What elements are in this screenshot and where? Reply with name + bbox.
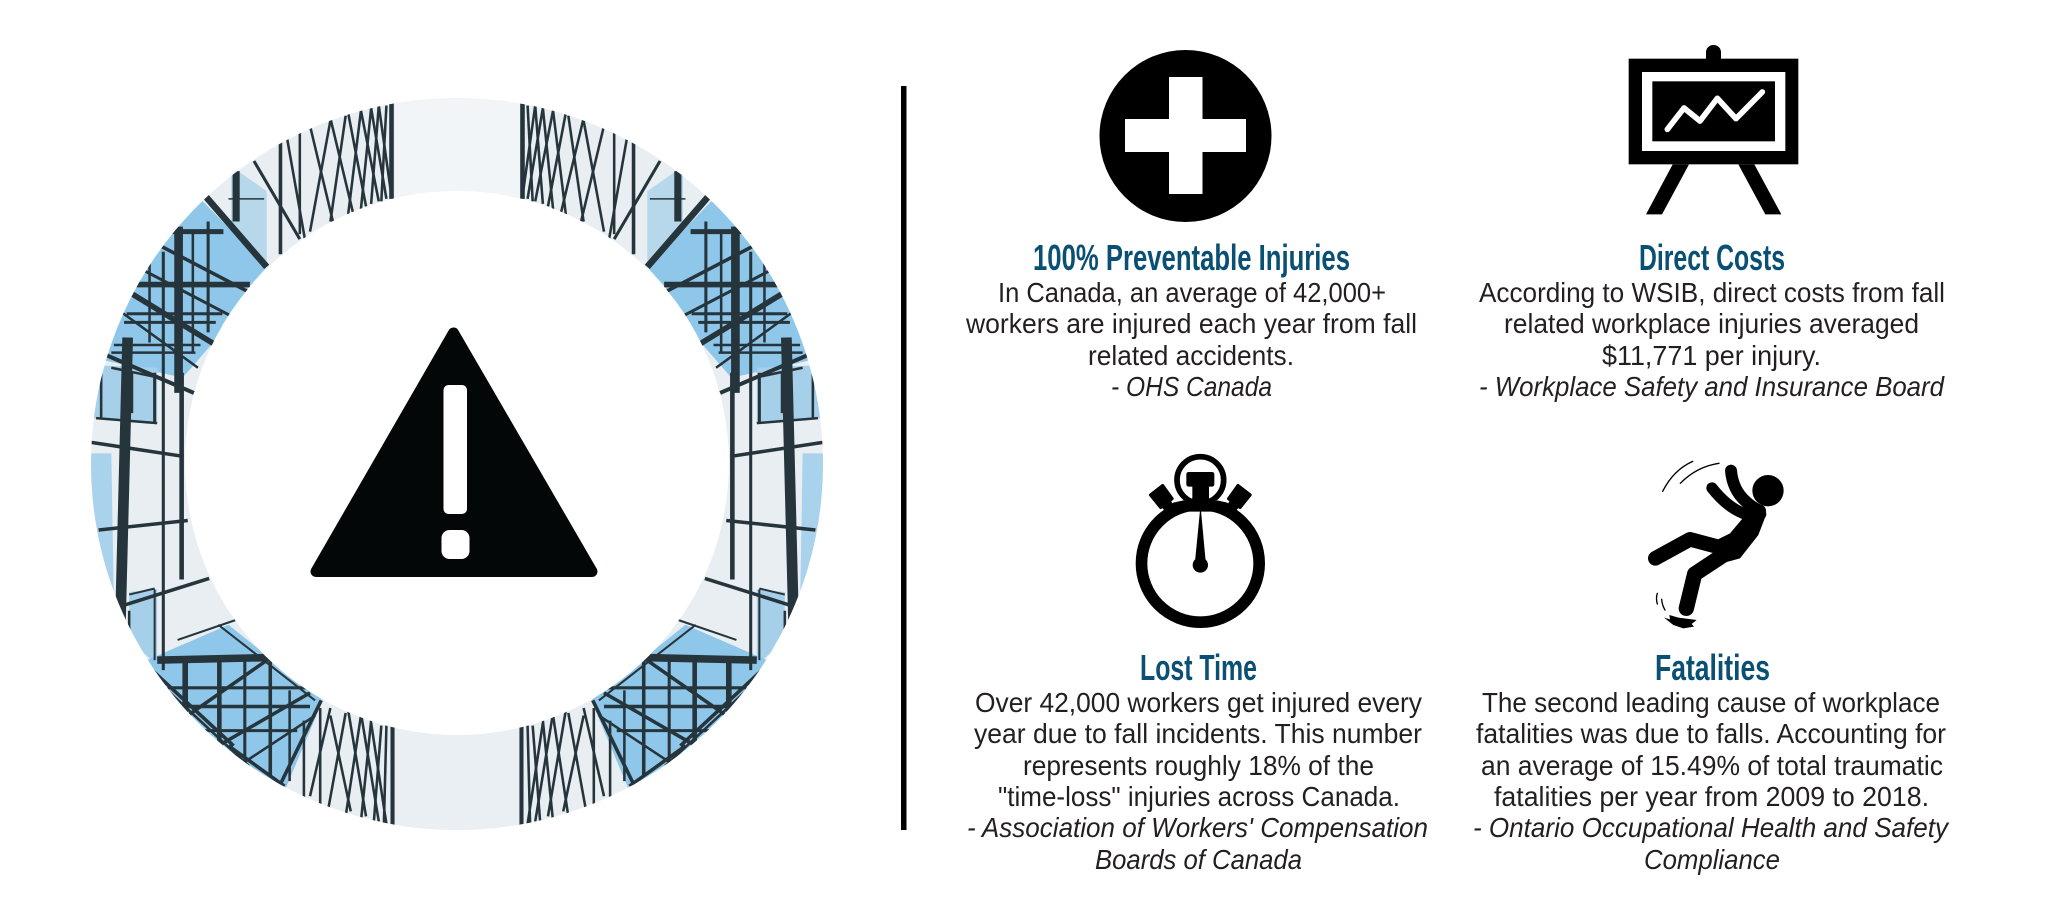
body text: - Association of Workers' Compensation <box>967 812 1428 843</box>
body text: - OHS Canada <box>1111 371 1272 402</box>
body text: related workplace injuries averaged <box>1504 308 1919 339</box>
icon: medical plus <box>1100 50 1272 222</box>
body text: $11,771 per injury. <box>1602 340 1821 371</box>
body text: year due to fall incidents. This number <box>974 718 1422 749</box>
body text <box>965 277 1417 402</box>
body text: According to WSIB, direct costs from fall <box>1479 277 1945 308</box>
body text: Over 42,000 workers get injured every <box>975 687 1422 718</box>
body text: In Canada, an average of 42,000+ <box>998 277 1386 308</box>
body text: fatalities per year from 2009 to 2018. <box>1494 781 1929 812</box>
icon: chart on easel <box>1629 45 1798 214</box>
body text <box>967 687 1428 875</box>
panel: ring photo with warning sign <box>80 90 840 850</box>
icon: stopwatch <box>1141 457 1259 622</box>
body text: - Workplace Safety and Insurance Board <box>1479 371 1945 402</box>
heading: Direct Costs <box>1639 237 1785 278</box>
body text: "time-loss" injuries across Canada. <box>998 781 1400 812</box>
body text <box>1473 687 1950 875</box>
icon: falling person <box>1655 461 1784 628</box>
ring: glass building photo <box>80 90 840 850</box>
heading: 100% Preventable Injuries <box>1033 237 1350 278</box>
panel: 100% preventable injuries <box>965 50 1417 402</box>
panel: lost time <box>967 457 1428 875</box>
body text: - Ontario Occupational Health and Safety <box>1473 812 1950 843</box>
body text: workers are injured each year from fall <box>965 308 1417 339</box>
body text <box>1479 277 1945 402</box>
heading: Lost Time <box>1140 647 1257 688</box>
body text: Boards of Canada <box>1095 844 1302 875</box>
body text: an average of 15.49% of total traumatic <box>1481 750 1943 781</box>
panel: fatalities <box>1473 461 1950 875</box>
icon: warning triangle <box>316 333 592 572</box>
heading: Fatalities <box>1655 647 1770 688</box>
panel: direct costs <box>1479 45 1945 402</box>
body text: fatalities was due to falls. Accounting for <box>1476 718 1946 749</box>
divider line <box>901 86 906 830</box>
body text: Compliance <box>1644 844 1780 875</box>
body text: The second leading cause of workplace <box>1482 687 1940 718</box>
body text: related accidents. <box>1088 340 1294 371</box>
body text: represents roughly 18% of the <box>1023 750 1374 781</box>
